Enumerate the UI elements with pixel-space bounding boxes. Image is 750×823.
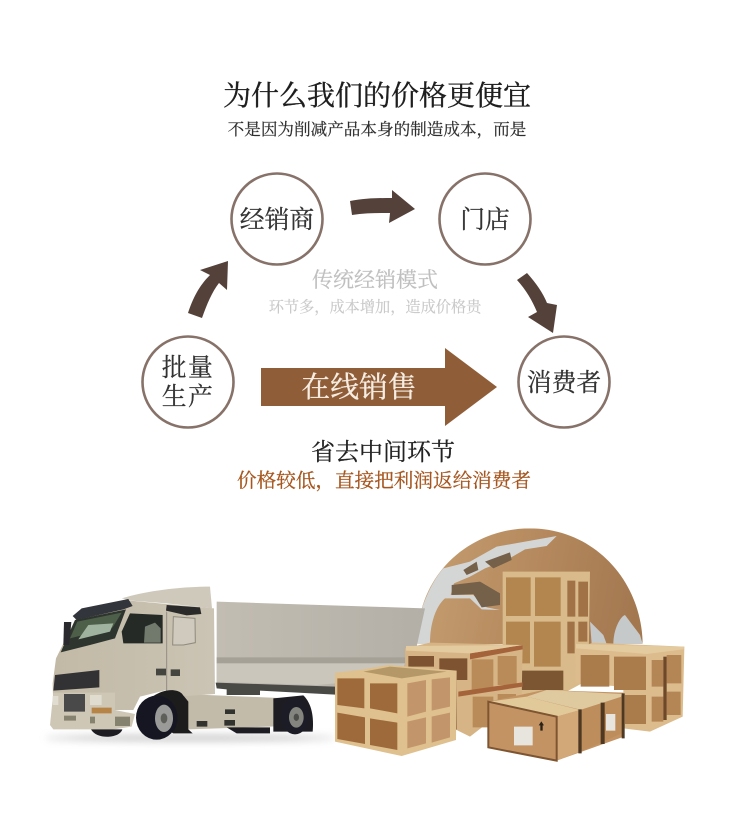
infographic canvas: [50, 81, 684, 762]
grille: [53, 670, 99, 691]
ground shadow: [45, 735, 335, 741]
front lower tyre: [91, 729, 122, 737]
arrow: 批量生产 to 经销商: [188, 261, 228, 318]
globe landmass: dark shaded Europe: [452, 552, 512, 607]
node: 门店: 门店: [460, 206, 510, 234]
wheel arch: [140, 690, 193, 733]
crate: tall back: [503, 572, 590, 697]
cab body: [53, 601, 215, 710]
node: 门店: [440, 174, 530, 264]
front wheel: [136, 696, 177, 740]
arrow: 门店 to 消费者: [517, 273, 557, 333]
crate: front bottom: [488, 690, 625, 761]
mirror: [63, 622, 71, 645]
rear wheel: [281, 699, 309, 734]
subtitle: 不是因为削减产品本身的制造成本，而是: [228, 120, 526, 139]
node: 消费者: [518, 336, 610, 428]
node: 批量生产: [142, 336, 234, 428]
crates: [335, 572, 684, 761]
globe: [418, 528, 643, 644]
rear tyre: [273, 695, 313, 732]
shipping label: [514, 727, 533, 745]
side window: [122, 613, 163, 643]
windscreen: [61, 609, 126, 652]
node: 经销商: 经销商: [240, 206, 314, 234]
chassis fittings: [197, 709, 235, 727]
traditional model heading: 传统经销模式: [312, 268, 438, 292]
chassis: [183, 694, 288, 729]
crate: front left: [335, 665, 457, 756]
globe landmass: left rim and Europe coast: [413, 536, 557, 647]
globe landmass: India and Asia south: [590, 615, 643, 644]
truck: [50, 587, 425, 740]
crate: middle back: [405, 643, 523, 737]
node: 经销商: [232, 174, 322, 264]
title: 为什么我们的价格更便宜: [223, 80, 531, 112]
sun visor: [73, 599, 133, 620]
lower bumper: [50, 693, 135, 729]
heading: skip middle steps: 省去中间环节: [311, 439, 455, 466]
node: 消费者: 消费者: [527, 369, 601, 397]
roof fairing: [122, 587, 212, 608]
node: 批量生产: 生产: [162, 383, 214, 411]
note: lower price: 价格较低，直接把利润返给消费者: [237, 470, 531, 492]
arrow: online sales: [261, 348, 497, 426]
trailer: [216, 602, 425, 695]
traditional model note: 环节多，成本增加，造成价格贵: [269, 298, 482, 316]
arrow: 经销商 to 门店: [350, 190, 415, 223]
node: 批量生产: 批量: [162, 354, 214, 382]
arrow: online sales: 在线销售: [301, 372, 417, 404]
crate: right: [575, 643, 684, 732]
door lines and window: [173, 617, 195, 645]
